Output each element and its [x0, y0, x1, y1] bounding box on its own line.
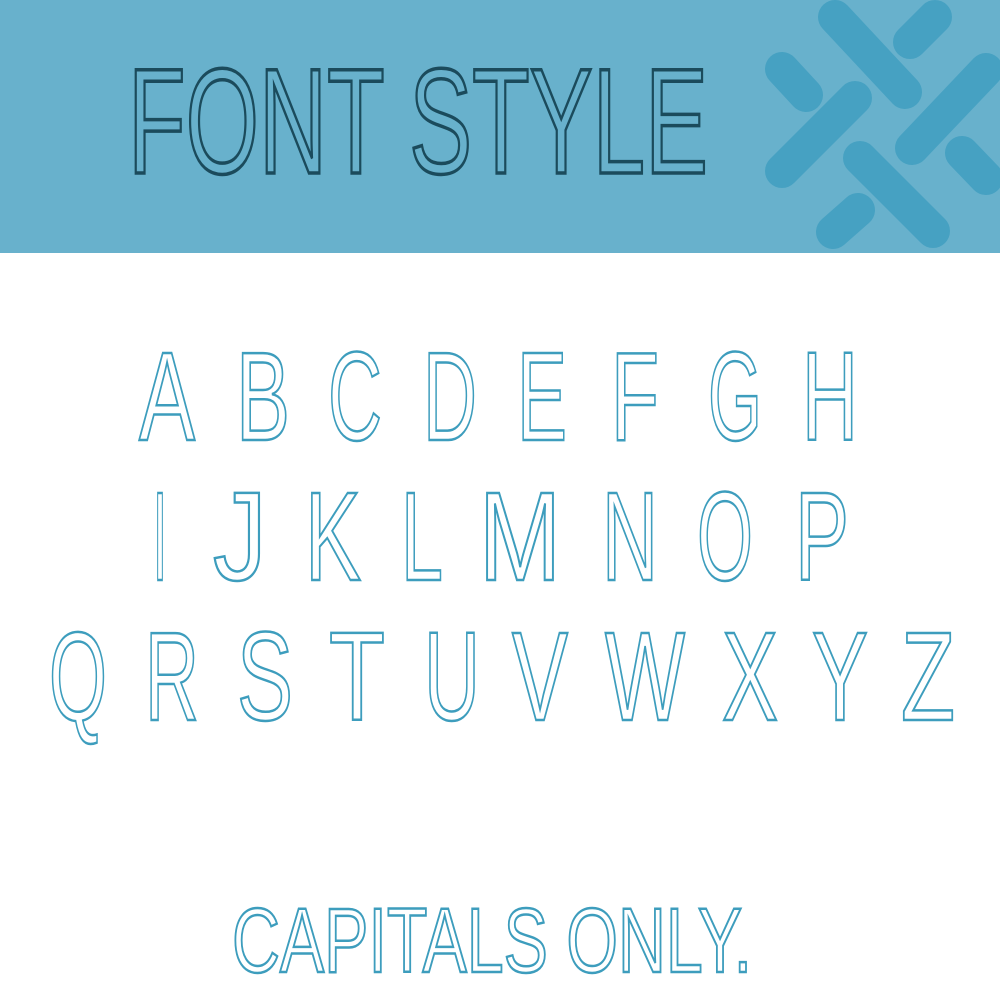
alphabet row 3: S [237, 606, 293, 747]
alphabet row 2 [153, 466, 849, 607]
alphabet row 3: U [424, 606, 480, 747]
alphabet row 1: F [611, 326, 659, 467]
header band [0, 0, 1000, 253]
icon: woven X pattern [782, 17, 986, 232]
alphabet row 2: O [697, 466, 753, 607]
alphabet row 3 [49, 606, 955, 747]
alphabet row 2: P [795, 466, 849, 607]
alphabet row 2: M [479, 466, 561, 607]
footer caption: CAPITALS ONLY. [232, 890, 752, 992]
alphabet row 1: E [517, 326, 567, 467]
alphabet row 2: J [213, 466, 267, 607]
alphabet row 2: I [153, 466, 167, 607]
alphabet row 3: V [512, 606, 568, 747]
alphabet row 1: B [236, 326, 290, 467]
alphabet row 3: Z [901, 606, 955, 747]
alphabet row 2: L [401, 466, 443, 607]
alphabet row 1: A [139, 326, 195, 467]
alphabet row 3: Y [812, 606, 868, 747]
alphabet row 3: Q [49, 606, 107, 747]
alphabet row 2: N [602, 466, 658, 607]
alphabet row 1: H [802, 326, 858, 467]
alphabet row 1: D [423, 326, 477, 467]
alphabet row 3: R [145, 606, 199, 747]
alphabet row 1 [139, 326, 858, 467]
alphabet row 3: T [329, 606, 385, 747]
alphabet row 1: G [708, 326, 762, 467]
alphabet row 1: C [328, 326, 382, 467]
alphabet row 3: W [605, 606, 685, 747]
alphabet row 3: X [722, 606, 778, 747]
alphabet row 2: K [305, 466, 361, 607]
